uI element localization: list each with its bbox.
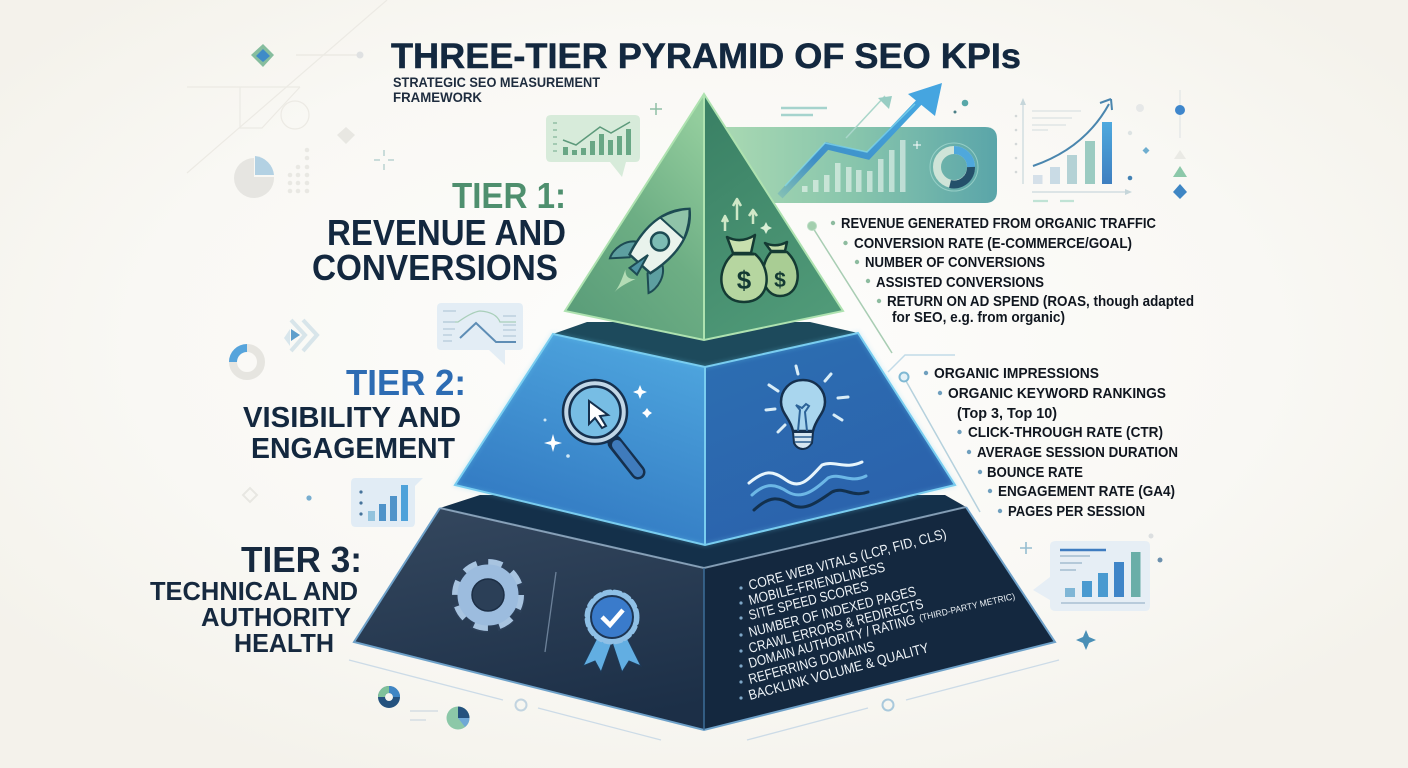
icon: plus [650, 103, 662, 115]
tier 3 metrics list: MOBILE-FRIENDLINESS [747, 559, 887, 608]
tier 2 heading [243, 362, 466, 465]
list: tier 1 metrics: REVENUE GENERATED FROM ORGANIC TRAFFIC [841, 215, 1156, 232]
list: tier 2 metrics: ORGANIC IMPRESSIONS [934, 365, 1099, 382]
tier 2 heading: TIER 2: [346, 362, 466, 403]
tier 3 block [354, 495, 1055, 730]
icon: gear [458, 565, 518, 625]
tier 3 metrics list: CORE WEB VITALS (LCP, FID, CLS) [747, 525, 948, 593]
tier 2 block [455, 322, 955, 545]
tier 3 heading [150, 539, 362, 658]
list: tier 2 metrics: (Top 3, Top 10) [957, 405, 1057, 422]
list: tier 2 metrics: ENGAGEMENT RATE (GA4) [998, 483, 1175, 500]
icon: badge [583, 592, 641, 672]
tier 3 metrics list: BACKLINK VOLUME & QUALITY [747, 639, 931, 703]
tier 3 heading: TECHNICAL AND [150, 576, 358, 606]
tier 3 heading: AUTHORITY [201, 602, 351, 632]
icon: bottom-left donut [382, 690, 396, 704]
icon: magnifier with cursor [544, 380, 652, 472]
subtitle: STRATEGIC SEO MEASUREMENT [393, 74, 600, 90]
tier 3 heading: HEALTH [234, 628, 334, 658]
icon: tier 3 bar bubble [351, 478, 423, 527]
title: THREE-TIER PYRAMID OF SEO KPIs [391, 37, 1021, 76]
tier 3 metrics list: CRAWL ERRORS & REDIRECTS [747, 595, 925, 656]
icon: light bulb [766, 366, 848, 449]
icon: rocket [594, 190, 710, 311]
list: tier 1 metrics: ASSISTED CONVERSIONS [876, 274, 1044, 291]
tier 3 metrics list: SITE SPEED SCORES [747, 578, 870, 623]
icon: crosshair [374, 150, 394, 170]
icon: dot grid [288, 148, 309, 193]
icon: right bar chart with arrow [1015, 98, 1132, 201]
tier 3 metrics list: NUMBER OF INDEXED PAGES [747, 583, 918, 640]
icon: waves [749, 462, 868, 510]
icon: tier 2 line chart bubble [437, 303, 523, 365]
decorative dots near banner [954, 100, 968, 114]
list: tier 2 metrics: PAGES PER SESSION [1008, 503, 1145, 520]
tier 1 block [565, 94, 843, 340]
decorative right column icons [1128, 90, 1187, 199]
list: tier 1 metrics: for SEO, e.g. from organic) [892, 309, 1065, 326]
icon: money bags [721, 199, 798, 302]
list: tier 2 metrics: BOUNCE RATE [987, 464, 1083, 481]
decorative shapes bottom right [1020, 534, 1162, 650]
tier 2 heading: VISIBILITY AND [243, 402, 461, 434]
tier 3 metrics list [739, 525, 1016, 703]
decorative top-left geometry [187, 0, 387, 173]
tier 3 heading: TIER 3: [241, 539, 362, 580]
tier 1 heading: REVENUE AND [327, 212, 566, 253]
tier 2 heading: ENGAGEMENT [251, 433, 455, 465]
subtitle: FRAMEWORK [393, 89, 482, 105]
icon: money bags: $ [774, 269, 786, 292]
leader line: tier 1 [808, 222, 892, 353]
list: tier 2 metrics: AVERAGE SESSION DURATION [977, 444, 1178, 461]
icon: teal banner with growth chart [725, 83, 997, 203]
icon: diamond [251, 44, 274, 67]
list: tier 1 metrics: NUMBER OF CONVERSIONS [865, 254, 1045, 271]
list: tier 1 metrics: CONVERSION RATE (E-COMMERCE/GOAL) [854, 235, 1132, 252]
list: tier 1 metrics: RETURN ON AD SPEND (ROAS, though adapted [887, 293, 1194, 310]
tier 3 metrics list: DOMAIN AUTHORITY / RATING [747, 611, 917, 671]
leader line: tier 2 [888, 355, 980, 512]
list: tier 2 metrics: CLICK-THROUGH RATE (CTR) [968, 424, 1163, 441]
icon: bottom-left pie [410, 706, 470, 730]
left tier-2 decorations [233, 320, 317, 376]
icon: green line chart bubble [546, 115, 640, 177]
list: tier 1 metrics [831, 215, 1194, 326]
tier 1 heading: TIER 1: [452, 175, 566, 216]
list: tier 2 metrics: ORGANIC KEYWORD RANKINGS [948, 385, 1166, 402]
list: tier 2 metrics [924, 365, 1178, 520]
icon: money bags: $ [737, 265, 752, 295]
tier 1 heading [312, 175, 566, 288]
icon: pie [234, 156, 274, 198]
icon: bottom-right chart bubble [1033, 541, 1150, 611]
icon: grey diamond [337, 127, 355, 144]
subtitle [393, 74, 600, 105]
tier 3 metrics list: REFERRING DOMAINS [747, 638, 876, 687]
baseline connectors [349, 660, 1059, 740]
tier 3 metrics list: (THIRD-PARTY METRIC) [918, 591, 1016, 623]
pyramid [354, 94, 1055, 730]
tier 1 heading: CONVERSIONS [312, 247, 558, 288]
decorative small shapes [243, 488, 312, 502]
